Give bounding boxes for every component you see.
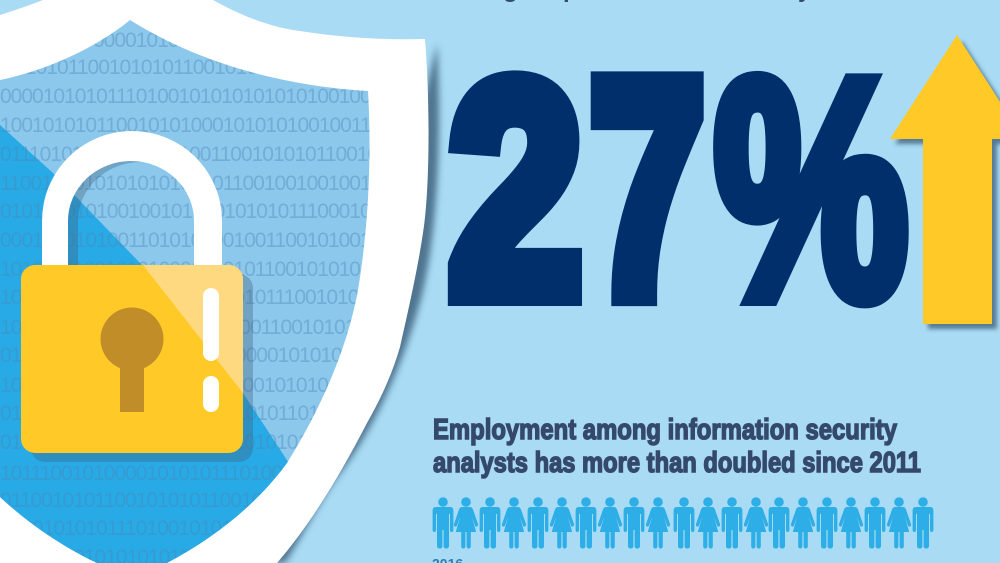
- binary pattern: 010101001010100101001010101101010010: [0, 402, 383, 425]
- binary pattern: 100101010110010101000101010100100110: [0, 114, 382, 137]
- binary pattern: 010101010010101010010100001010101010: [0, 344, 385, 367]
- big number 27%: %: [714, 15, 908, 364]
- shield illustration: [0, 0, 440, 563]
- up arrow: [890, 35, 1000, 329]
- padlock: [21, 131, 243, 453]
- padlock shackle: [42, 131, 222, 270]
- binary pattern: 101010110010101001010101011100101010: [0, 286, 380, 309]
- binary pattern: 101010110011001011000110011001010101: [0, 316, 377, 339]
- padlock shadow: [31, 144, 253, 462]
- binary pattern: 101110010100001010101110100101010101: [0, 462, 379, 485]
- pictogram row of people: [433, 497, 933, 548]
- binary pattern: [0, 29, 385, 563]
- description text: [433, 414, 921, 479]
- big number 27%: 2: [449, 20, 582, 358]
- binary pattern: 010101010110010100101010101010110101: [0, 431, 382, 454]
- binary pattern: 110010001010101010100110010010010010: [0, 172, 382, 195]
- shield inner panel: [0, 20, 370, 563]
- keyhole: [100, 308, 164, 412]
- glint marks: [203, 288, 219, 412]
- diagonal dark blue band: [0, 125, 300, 563]
- binary pattern: 101010110010101000101010110010101011: [0, 258, 380, 281]
- binary pattern: 101001010110010101010110010101010110: [0, 374, 380, 397]
- big number 27%: 7: [590, 18, 705, 360]
- shield shadow: [250, 44, 439, 563]
- shield white frame: [0, 0, 429, 563]
- binary pattern: 00001010101: [93, 29, 211, 52]
- binary pattern: 000101010100110101010010011001010010: [0, 229, 382, 252]
- cropped headline fragment at top edge: [503, 0, 812, 3]
- binary pattern: 00001010101110100101010101010100100: [0, 85, 371, 108]
- binary pattern: 100010101011101001010101001010101010: [0, 517, 382, 540]
- binary pattern: 010101010100100101010101010111000101: [0, 200, 382, 223]
- arrow shape: [890, 35, 1000, 324]
- binary pattern: 1010110010101011001010: [25, 56, 257, 79]
- binary pattern: 011101010010101001001100101010110010: [0, 143, 379, 166]
- description text: Employment among information security: [433, 414, 897, 446]
- arrow shadow: [895, 41, 1000, 329]
- padlock highlight: [143, 265, 243, 393]
- padlock body: [21, 265, 243, 453]
- binary pattern: 011001010110010101011001010101100101: [0, 489, 379, 512]
- big number 27%: [449, 15, 908, 364]
